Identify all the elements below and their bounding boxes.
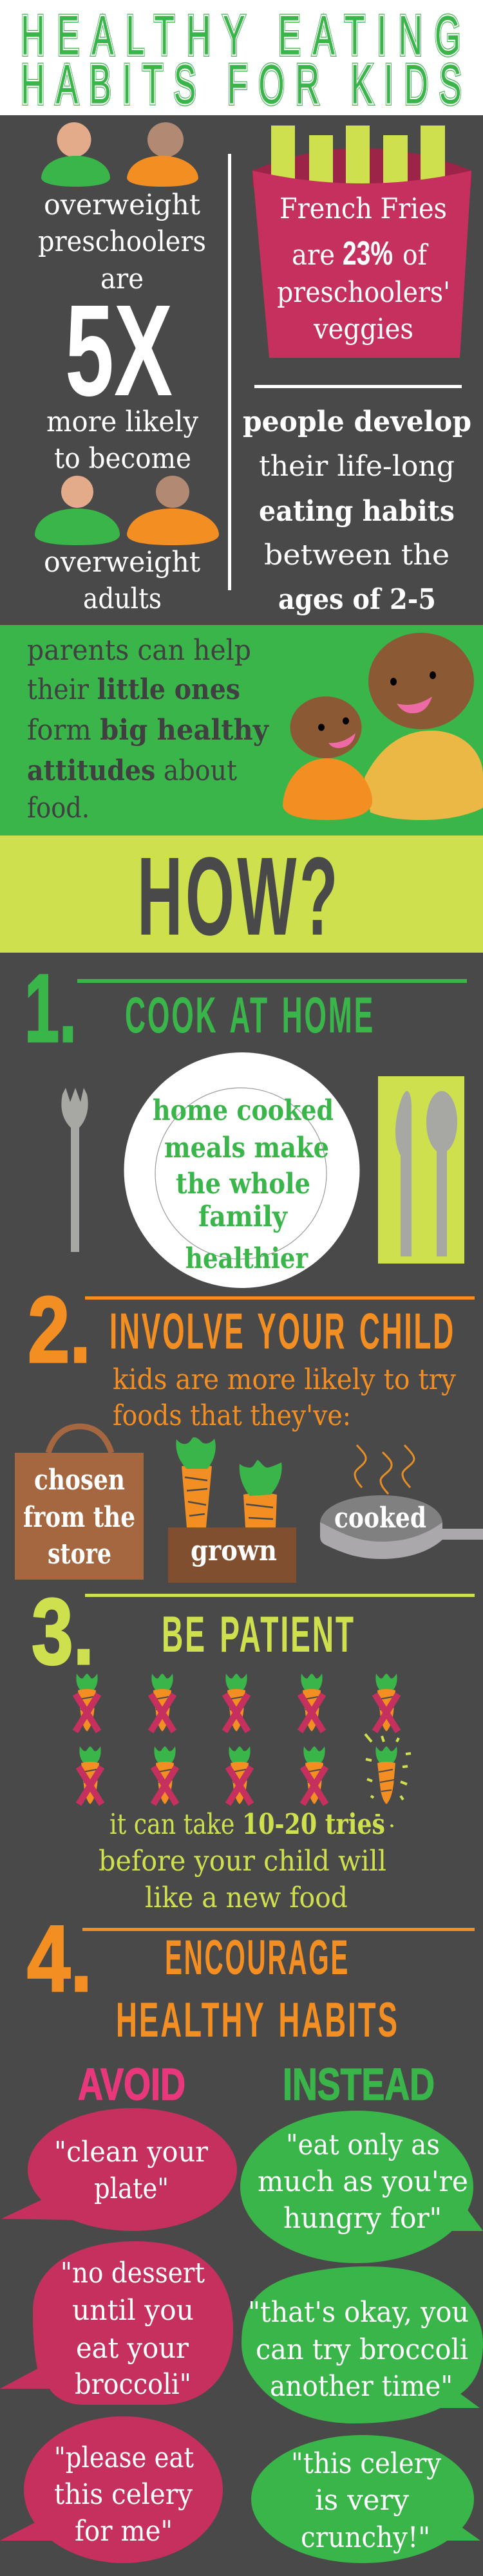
text: parents can help (27, 634, 269, 825)
speech bubble: no dessert: broccoli" (75, 2368, 191, 2401)
icon: fork (61, 1088, 88, 1252)
speech bubble: this celery is very crunchy: "this celery (291, 2447, 441, 2480)
speech bubble: clean your plate: plate" (94, 2172, 169, 2205)
text: overweight adults: adults (83, 583, 162, 615)
icon: shopping bag: store (48, 1538, 111, 1571)
plate text: family (198, 1200, 288, 1233)
text: french fries: veggies (313, 313, 413, 346)
text: overweight preschoolers are: are (100, 263, 144, 295)
speech bubble: please eat this celery: for me" (75, 2515, 173, 2548)
text: kids are more likely (113, 1363, 456, 1432)
text: overweight adults (44, 546, 200, 615)
text block: life-long habits: eating habits (259, 495, 455, 528)
plate text (153, 1094, 334, 1275)
text: french fries: are (292, 239, 335, 272)
number 4: 4. (27, 1906, 92, 2011)
speech bubble: eat only as much: hungry for" (283, 2202, 442, 2235)
text: more likely to become (46, 406, 198, 475)
step 3: be patient (32, 1579, 475, 1914)
icon: frying pan: cooked (334, 1502, 426, 1535)
panel: overweight statistic (35, 122, 219, 615)
speech bubble: this celery is very crunchy: is very (315, 2484, 409, 2517)
text: parents can help: food. (27, 792, 90, 825)
icon: growing carrots: grown (191, 1535, 277, 1567)
speech bubble: eat only as much (240, 2111, 483, 2263)
heading: avoid: AVOID (78, 2059, 185, 2109)
step 1: cook at home (24, 954, 467, 1288)
number 1: 1. (24, 954, 77, 1062)
plate text: meals make (164, 1132, 329, 1164)
panel: french fries statistic (252, 126, 471, 358)
icon: fries container (252, 126, 471, 358)
speech bubble: eat only as much: "eat only as (286, 2129, 440, 2161)
text: 10-20 tries (99, 1808, 386, 1914)
speech bubble: that's okay (242, 2266, 483, 2423)
icon: frying pan (320, 1445, 483, 1559)
title (21, 5, 461, 116)
text: 10-20 tries: before your child will (99, 1845, 386, 1878)
icon: shopping bag (15, 1426, 144, 1580)
text block: life-long habits: ages of 2-5 (278, 583, 436, 616)
title: HABITS FOR KIDS (21, 54, 461, 116)
speech bubble: no dessert (0, 2241, 233, 2405)
text: 10-20 tries: like a new food (145, 1881, 348, 1914)
text: more likely to become: more likely (46, 406, 198, 438)
text block: life-long habits: their life-long (259, 450, 455, 483)
text: parents can help: their little ones (27, 673, 240, 706)
text: parents can help: attitudes about (27, 754, 237, 787)
icon: shopping bag: from the (23, 1501, 135, 1534)
icon: napkin with knife and spoon (378, 1076, 464, 1264)
speech bubble: this celery is very crunchy: crunchy!" (301, 2521, 430, 2554)
text: kids are more likely: kids are more likely to try (113, 1363, 456, 1396)
speech bubble: no dessert: "no dessert (61, 2257, 205, 2290)
title: HEALTHY EATING (21, 5, 460, 67)
icon row: rejected carrots 1-5 (75, 1674, 398, 1731)
icon: child (283, 696, 372, 820)
icon: adults (35, 476, 219, 545)
text: 10-20 tries: it can take 10-20 tries (109, 1808, 385, 1841)
title band (0, 0, 483, 116)
number 3: 3. (32, 1579, 94, 1684)
text block: life-long habits: between the (264, 539, 450, 572)
speech bubble: please eat this celery: "please eat (54, 2441, 194, 2474)
icon: preschoolers (41, 122, 198, 187)
speech bubble: that's okay: can try broccoli (256, 2333, 468, 2366)
speech bubble: that's okay: another time" (270, 2370, 453, 2403)
speech bubble: this celery is very crunchy (251, 2435, 480, 2563)
text: french fries: preschoolers' (277, 276, 450, 309)
text: french fries: French Fries (279, 192, 447, 225)
icon: shopping bag: chosen (34, 1464, 125, 1497)
text block: life-long habits: people develop (243, 406, 471, 438)
icon: growing carrots (168, 1437, 296, 1583)
plate (124, 1052, 359, 1288)
speech bubble: please eat this celery (0, 2416, 223, 2563)
plate text: the whole (176, 1168, 310, 1200)
plate text: home cooked (153, 1094, 334, 1127)
text block: life-long habits (243, 406, 471, 616)
step 2: involve your child (15, 1277, 483, 1583)
text: parents can help: parents can help (27, 634, 251, 667)
speech bubble: no dessert: eat your (76, 2332, 189, 2365)
heading: encourage healthy habits (116, 1930, 399, 2048)
big number: 5X: 5X (65, 277, 173, 423)
text: overweight preschoolers are (38, 189, 206, 295)
speech bubble: clean your plate: "clean your (54, 2136, 209, 2169)
plate text: healthier (185, 1242, 308, 1275)
panel: parents can help (0, 625, 483, 835)
number 2: 2. (28, 1277, 91, 1382)
text: overweight adults: overweight (44, 546, 200, 579)
text: more likely to become: to become (54, 442, 191, 475)
speech bubble: eat only as much: much as you're (258, 2165, 468, 2198)
step 4: encourage healthy habits (0, 1906, 483, 2563)
text: kids are more likely: foods that they've: (113, 1399, 351, 1432)
text: french fries: of (402, 239, 428, 272)
text: french fries: 23% (343, 235, 393, 272)
icon: parent (365, 633, 483, 820)
heading: instead: INSTEAD (283, 2059, 435, 2109)
speech bubble: clean your plate (1, 2108, 237, 2231)
icon row: rejected carrots 6-9 and accepted carrot (79, 1734, 411, 1827)
text: overweight preschoolers are: preschoolers (38, 225, 206, 258)
speech bubble: no dessert: until you (72, 2294, 194, 2327)
text: overweight preschoolers are: overweight (44, 189, 200, 221)
text: parents can help: form big healthy (27, 714, 269, 747)
text: french fries (277, 192, 450, 346)
speech bubble: that's okay: "that's okay, you (248, 2296, 469, 2329)
speech bubble: please eat this celery: this celery (54, 2478, 193, 2511)
